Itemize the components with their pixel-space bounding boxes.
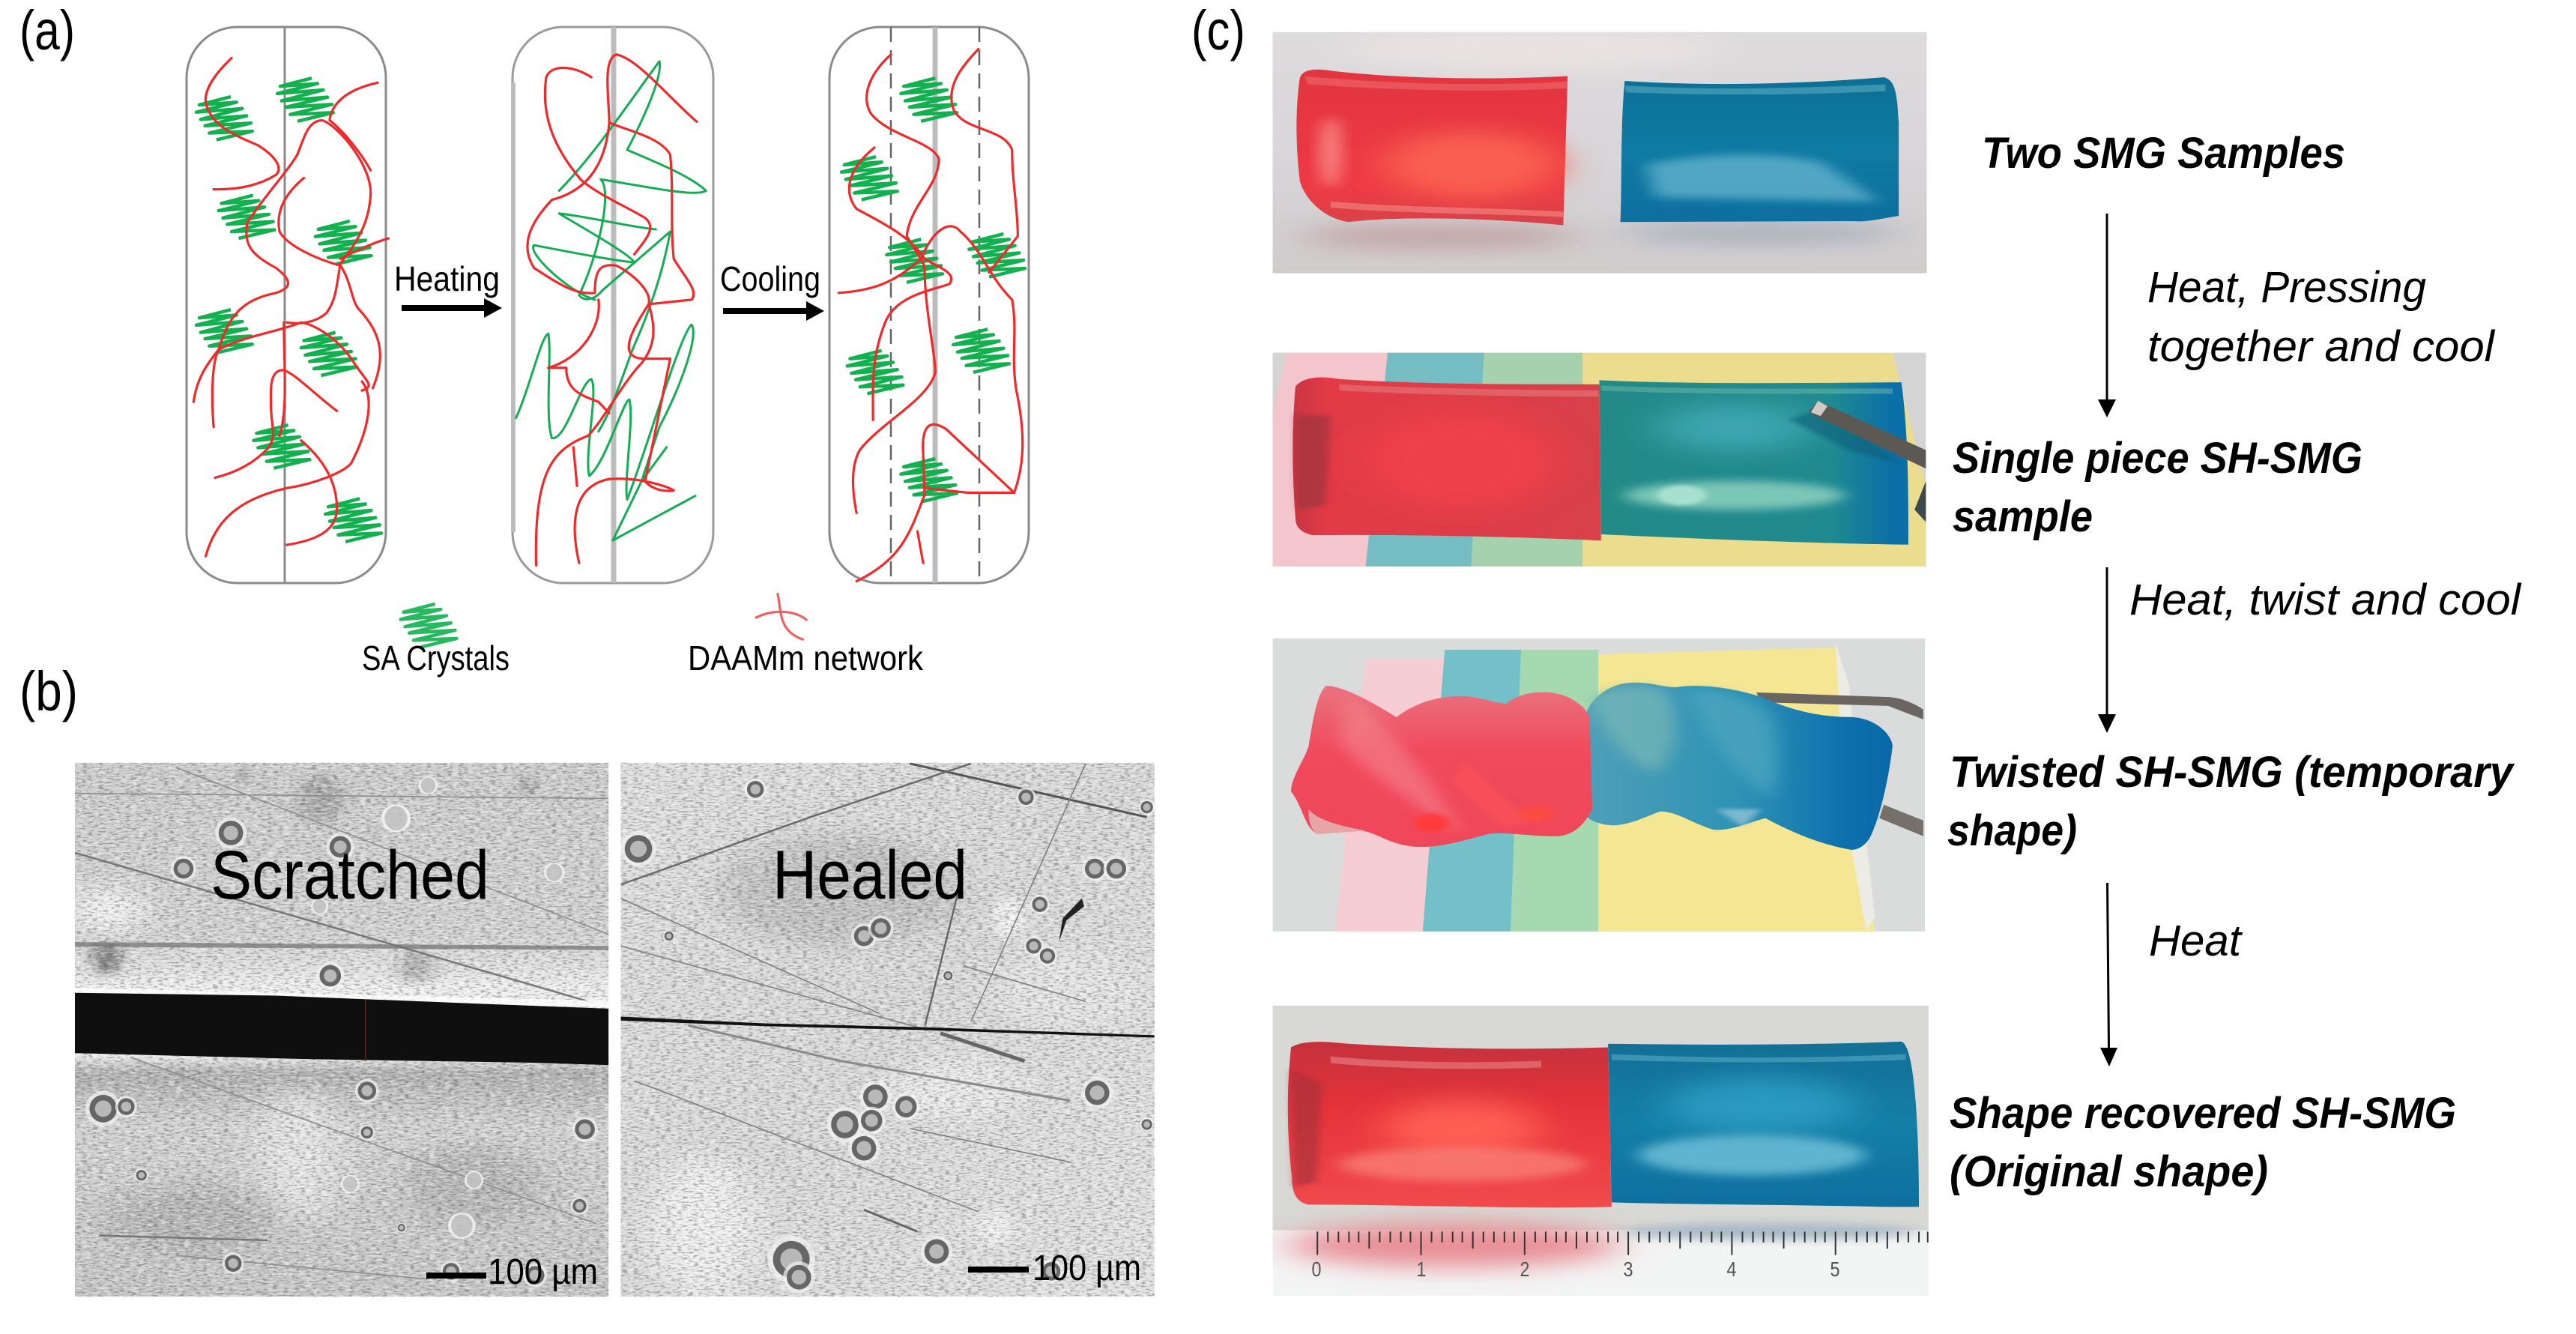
step text: heat, twist: Heat, twist and cool (2129, 576, 2522, 624)
step text: heat, pressing (2147, 263, 2496, 371)
legend icon: SA crystal (401, 604, 456, 647)
arrow: step 3 (2100, 883, 2117, 1066)
photo: twisted SH-SMG (1272, 639, 1925, 932)
tweezers (1809, 401, 1926, 468)
panel label: (b): (b) (19, 660, 78, 722)
scale label: scratched: 100 µm (488, 1252, 598, 1292)
step caption: twisted: Twisted SH-SMG (temporary (1950, 748, 2515, 797)
arrow: step 1 (2098, 214, 2116, 417)
scale bar: scratched (426, 1273, 486, 1279)
step caption: single piece: sample (1953, 492, 2093, 541)
ruler numbers: 2 (1520, 1258, 1530, 1281)
step caption: twisted (1947, 748, 2515, 855)
legend icon: DAAMm network (756, 594, 806, 639)
scale bar: healed (968, 1267, 1029, 1273)
network strands and crystals (193, 49, 1025, 647)
capsule: heated sample (513, 27, 713, 583)
capsule: initial scratched sample (187, 27, 386, 583)
step caption: shape recovered: Shape recovered SH-SMG (1950, 1089, 2456, 1138)
label: heating: Heating (394, 259, 500, 298)
photo: two SMG samples (1272, 28, 1927, 274)
panel label: (a): (a) (19, 0, 75, 61)
ruler numbers: 5 (1830, 1258, 1840, 1281)
step caption: twisted: shape) (1947, 806, 2077, 855)
tweezers (1756, 692, 1923, 719)
label: cooling: Cooling (720, 259, 820, 298)
SA crystals (196, 78, 1025, 542)
DAAMm strands: capsule 3 (838, 49, 1023, 582)
healed scratch line (621, 1017, 1155, 1038)
scratch band (75, 993, 608, 1065)
legend label: DAAMm network: DAAMm network (688, 639, 924, 677)
DAAMm strands: capsule 1 (193, 58, 388, 556)
step text: heat: Heat (2149, 917, 2243, 965)
photo: shape recovered SH-SMG with ruler (1272, 1006, 1929, 1296)
polymer chains: capsule 2 green (516, 61, 706, 540)
capsule: cooled healed sample (829, 27, 1029, 583)
polymer chains: capsule 2 red (527, 55, 697, 565)
ruler numbers: 4 (1726, 1258, 1737, 1281)
arrow: step 2 (2098, 567, 2116, 733)
step text: heat, pressing: together and cool (2147, 322, 2496, 371)
arrow: cooling (723, 301, 824, 321)
label: healed: Healed (773, 837, 967, 914)
panel a: polymer network schematic (187, 27, 1029, 677)
arrow: heating (402, 298, 502, 318)
scale label: healed: 100 µm (1032, 1249, 1141, 1288)
step text: heat, pressing: Heat, Pressing (2147, 263, 2426, 312)
ruler numbers: 1 (1416, 1258, 1427, 1281)
panel b: healed micrograph (620, 763, 1155, 1299)
ruler numbers: 3 (1623, 1258, 1633, 1281)
step caption: two SMG samples: Two SMG Samples (1982, 129, 2345, 178)
label: scratched: Scratched (211, 837, 489, 914)
photo: single piece SH-SMG sample (1272, 353, 1926, 567)
step caption: single piece: Single piece SH-SMG (1953, 434, 2362, 483)
step caption: single piece (1953, 434, 2362, 541)
panel label: (c): (c) (1191, 0, 1245, 61)
step caption: shape recovered (1950, 1089, 2456, 1196)
step caption: shape recovered: (Original shape) (1950, 1147, 2268, 1196)
ruler numbers (1311, 1258, 1840, 1281)
ruler ticks (1317, 1231, 1928, 1255)
ruler numbers: 0 (1311, 1258, 1322, 1281)
legend label: SA crystals: SA Crystals (362, 639, 510, 677)
panel b: scratched micrograph (69, 763, 608, 1297)
